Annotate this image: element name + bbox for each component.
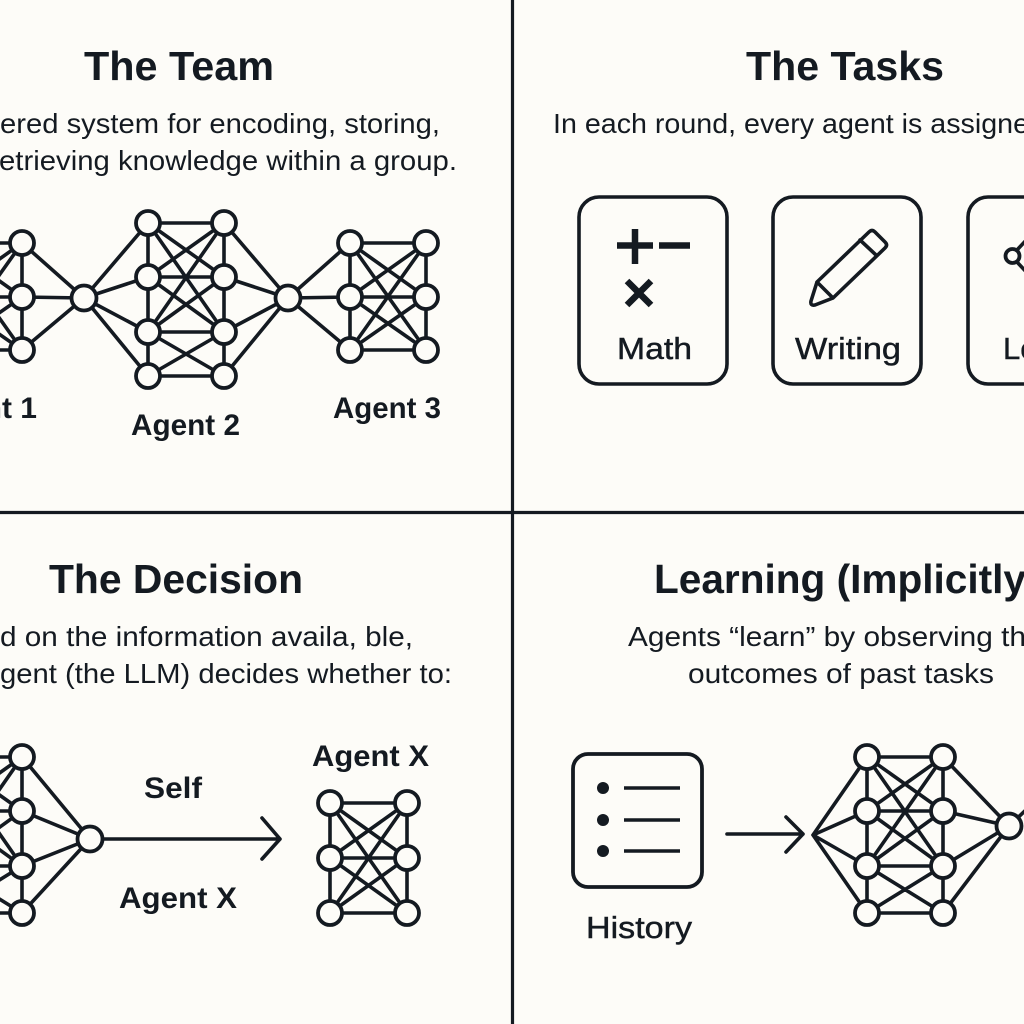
- icon: cropped node graph: [1006, 236, 1024, 276]
- label: math: Math: [617, 331, 692, 366]
- node: hub between agent 1 and agent 2: [72, 286, 96, 310]
- panel: learning: [573, 556, 1024, 945]
- text: learning description line 2: outcomes of past tasks: [688, 658, 994, 689]
- heading: the tasks: The Tasks: [746, 43, 944, 89]
- diagram: agent 2 network: [84, 211, 288, 388]
- icon: pencil: [811, 230, 886, 305]
- text: learning description line 1: Agents “learn” by observing th: [628, 621, 1024, 652]
- arrow: history to agent: [727, 817, 803, 852]
- heading: the decision: The Decision: [49, 556, 303, 602]
- text: team description line 2: etrieving knowledge within a group.: [0, 145, 457, 176]
- icon: history list: [573, 754, 702, 887]
- icon: math symbols: [617, 229, 690, 305]
- diagram: agent 1 network: [0, 231, 84, 362]
- card: writing: [773, 197, 921, 384]
- diagram: agent 3 network: [288, 231, 438, 362]
- label: agent 3: Agent 3: [333, 392, 441, 425]
- label: agent x above network: Agent X: [312, 740, 429, 773]
- diagram: deciding agent network: [0, 745, 102, 925]
- text: tasks description: In each round, every agent is assigne: [553, 108, 1024, 139]
- diagram: agent x network: [318, 791, 419, 925]
- diagram: learning agent network: [813, 745, 1024, 925]
- panel: the team: [0, 43, 457, 442]
- heading: learning: Learning (Implicitly: [654, 556, 1024, 602]
- text: decision description line 1: d on the information availa, ble,: [0, 621, 413, 652]
- card: math: [579, 197, 727, 384]
- heading: the team: The Team: [84, 43, 274, 89]
- label: agent 2: Agent 2: [131, 409, 240, 442]
- label: self: Self: [144, 772, 203, 805]
- text: decision description line 2: gent (the LLM) decides whether to:: [0, 658, 452, 689]
- label: writing: Writing: [795, 331, 901, 366]
- text: team description line 1: ered system for encoding, storing,: [0, 108, 440, 139]
- node: hub between agent 2 and agent 3: [276, 286, 300, 310]
- panel: the decision: [0, 556, 452, 925]
- card: third task, cropped: [968, 197, 1024, 384]
- panel: the tasks: [553, 43, 1024, 384]
- label: history: History: [586, 910, 693, 945]
- arrow: decision to agent x: [103, 818, 280, 859]
- label: agent x under arrow: Agent X: [119, 882, 237, 915]
